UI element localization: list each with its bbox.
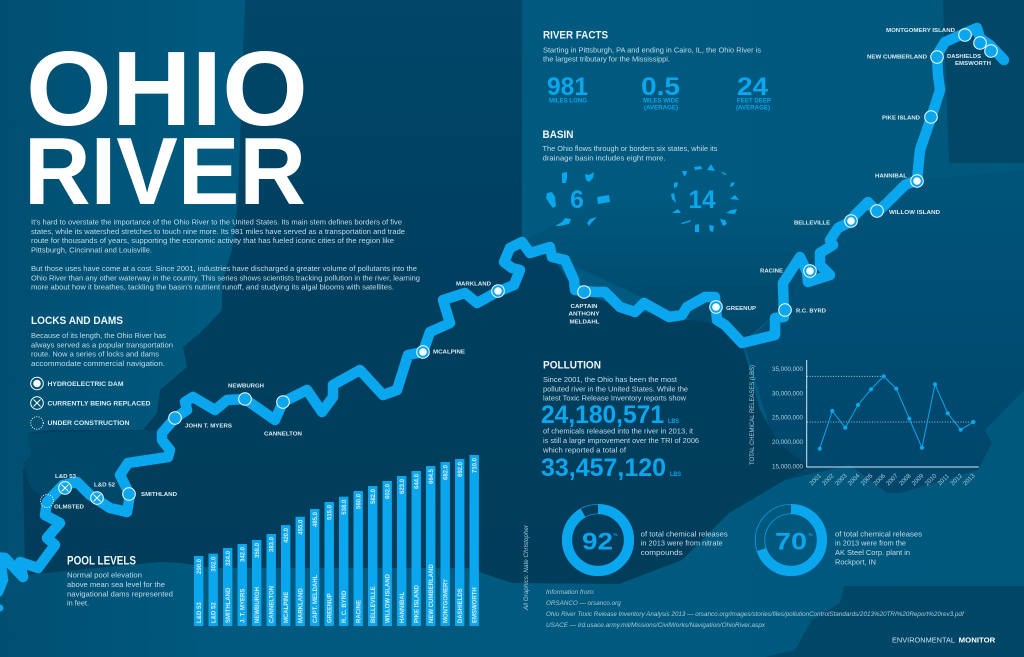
bar chart: pool levels: 383.0 [269,536,275,552]
title [24,30,308,225]
line chart: total chemical releases: 25,000,000 [772,415,804,422]
river facts section: 0.5 [641,73,680,101]
icon: fourteen basin states [671,164,739,232]
bar chart: pool levels: HANNIBAL [400,591,406,623]
dam markers [40,29,997,507]
pool levels text: in feet. [67,599,89,608]
pollution section: which reported a total of [542,445,627,454]
bar chart: pool levels: NEWBURGH [255,587,261,623]
bar chart: pool levels: 692.0 [458,461,464,477]
dam labels: ANTHONY [568,312,600,318]
dam labels: NEWBURGH [228,384,264,390]
line chart: total chemical releases: 2004 [847,472,862,487]
bar chart: pool levels: BELLEVILLE [371,586,377,623]
pool levels text: Normal pool elevation [67,570,142,580]
river facts section: Starting in Pittsburgh, PA and ending in Cairo, IL, the Ohio River is [543,45,761,54]
line chart: total chemical releases: 2002 [821,472,836,487]
intro text: Pittsburgh, Cincinnati and Louisville. [31,246,152,254]
river facts section [543,30,771,112]
donut: 70 percent: % [808,532,813,537]
intro text [31,218,420,292]
bar chart: pool levels: 682.0 [443,464,449,480]
dam labels: NEW CUMBERLAND [867,54,927,60]
bar chart: pool levels [194,455,479,626]
line chart: total chemical releases: 35,000,000 [772,366,804,373]
icon: six basin states [546,172,610,226]
basin section [542,129,718,214]
sources: ORSANCO — orsanco.org [546,600,621,607]
bar chart: pool levels: NEW CUMBERLAND [429,564,435,623]
legend: UNDER CONSTRUCTION [48,420,130,427]
basin section: 6 [570,186,584,214]
line chart: total chemical releases: 2013 [962,472,977,487]
bar chart: pool levels: 560.0 [356,493,362,509]
line chart: total chemical releases: 15,000,000 [772,464,804,471]
bar chart: pool levels: 710.0 [472,457,478,473]
publication brand [892,636,996,644]
dam labels: HANNIBAL [875,174,907,180]
bar chart: pool levels: 644.0 [414,473,420,489]
bar chart: pool levels: 515.0 [327,504,333,520]
pollution section: latest Toxic Release Inventory reports show [543,394,686,403]
callout: AK Steel: Rockport, IN [835,557,876,566]
locks and dams section [31,315,173,368]
river facts section: the largest tributary for the Mississippi. [543,55,670,64]
line chart: total chemical releases: TOTAL CHEMICAL RELEASES (LBS) [749,365,756,465]
dam labels: GREENUP [726,306,756,312]
title: RIVER [24,118,306,225]
intro text: more about how it breathes, tackling the basin’s nutrient runoff, and studying its algal blooms with satellites. [31,283,394,292]
title: OHIO [26,30,308,148]
bar chart: pool levels: 302.0 [211,556,217,572]
bar chart: pool levels: MCALPINE [284,592,290,623]
bar chart: pool levels: 420.0 [284,527,290,543]
pollution section: LBS [668,418,679,425]
line chart: total chemical releases: 2001 [808,472,823,487]
pollution section: 24,180,571 [541,401,664,429]
bar chart: pool levels: CANNELTON [269,586,275,623]
pollution section [541,360,699,482]
legend: HYDROELECTRIC DAM [48,381,124,388]
bar chart: pool levels: 290.0 [197,558,203,574]
pollution section: of chemicals released into the river in 2013, it [543,426,694,436]
bar chart: pool levels: 664.5 [429,468,435,484]
callout: nitrate compounds [641,529,728,557]
pollution section: polluted river in the United States. While the [543,384,688,393]
callout: AK Steel: in 2013 were from the [835,539,906,548]
dam labels: SMITHLAND [141,492,177,498]
dam labels: CANNELTON [264,432,302,438]
dam labels: MONTGOMERY ISLAND [886,28,955,34]
dam labels: JOHN T. MYERS [185,424,232,430]
bar chart: pool levels: RACINE [356,600,362,623]
pollution section: POLLUTION [543,360,601,372]
publication brand: ENVIRONMENTAL [892,636,955,644]
dam labels: DASHIELDS [947,54,981,60]
dam labels: MELDAHL [570,320,600,326]
pool levels text: POOL LEVELS [67,556,136,568]
bar chart: pool levels: L&D 53 [197,602,203,623]
sources: Ohio River Toxic Release Inventory Analysis 2013 — orsanco.org/images/stories/files/pollutionControlStandards/2013%20TRI%20Report%20rev3.pdf [546,611,965,618]
bar chart: pool levels: MONTGOMERY [443,579,449,623]
donut: 92 percent [562,504,634,576]
bar chart: pool levels: 358.0 [255,542,261,558]
river facts section: RIVER FACTS [543,30,608,42]
intro text: It’s hard to overstate the importance of the Ohio River to the United States. Its main stem defines borders of five [31,218,402,226]
line chart: total chemical releases: 20,000,000 [772,439,804,446]
callout: AK Steel: of total chemical releases [835,529,922,538]
line chart: total chemical releases: 2011 [936,472,951,487]
bar chart: pool levels: 602.0 [385,483,391,499]
bar chart: pool levels: EMSWORTH [472,587,478,623]
river facts section: MILES LONG [549,98,587,104]
dam labels: MARKLAND [456,282,491,288]
tail of river at left edge [0,604,4,612]
bar chart: pool levels: 324.0 [226,550,232,566]
bar chart: pool levels: 582.0 [371,488,377,504]
pollution section: 33,457,120 [541,454,666,482]
callout: nitrate compounds: in 2013 were from nitrate [641,539,723,548]
bar chart: pool levels: PIKE ISLAND [414,584,420,623]
dam labels: L&D 52 [94,482,116,488]
dam labels: OLMSTED [54,504,84,510]
callout: nitrate compounds: compounds [641,548,683,557]
line chart: total chemical releases: 30,000,000 [772,390,804,397]
donut: 92 percent: % [614,532,618,537]
bar chart: pool levels: R. C. BYRD [342,590,348,623]
locks and dams section: route. Now a series of locks and dams [31,350,159,359]
river facts section: (AVERAGE) [736,104,770,112]
pollution section: Since 2001, the Ohio has been the most [543,375,678,384]
intro text: Ohio River than any other waterway in the country. This series shows scientists tracking pollution in the river, learning [31,273,420,282]
basin section: 14 [688,186,716,214]
bar chart: pool levels: WILLOW ISLAND [385,573,391,623]
dam labels: L&D 53 [55,474,77,480]
river facts section: FEET DEEP [737,98,771,104]
line chart: total chemical releases: 2007 [885,472,900,487]
sources [546,589,965,629]
bar chart: pool levels: GREENUP [327,593,333,623]
dam labels: PIKE ISLAND [882,116,920,122]
dam labels: EMSWORTH [955,61,991,67]
callout: AK Steel: AK Steel Corp. plant in [835,548,910,557]
line chart: total chemical releases: 2012 [949,472,964,487]
bar chart: pool levels: 455.0 [298,519,304,535]
bar chart: pool levels: DASHIELDS [458,588,464,623]
sources: USACE — lrd.usace.army.mil/Missions/CivilWorks/Navigation/OhioRiver.aspx [546,622,766,629]
bar chart: pool levels: SMITHLAND [226,587,232,623]
basin section: The Ohio flows through or borders six states, while its [542,144,718,153]
dam labels: CAPTAIN [570,304,598,310]
pool levels text: above mean sea level for the [67,580,165,589]
bar chart: pool levels: MARKLAND [298,588,304,623]
legend [31,377,151,429]
bar chart: pool levels: J. T. MYERS [240,589,246,623]
publication brand: MONITOR [959,636,996,644]
intro text: states, while its watershed stretches to touch nine more. Its 981 miles have served as a transportation and trade [31,227,405,236]
legend: CURRENTLY BEING REPLACED [48,400,151,408]
donut: 70 percent [755,504,827,576]
line chart: total chemical releases: 2010 [924,472,939,487]
pool levels text [67,556,173,608]
line chart: total chemical releases: 2005 [860,472,875,487]
donut: 70 percent: 70 [775,528,807,556]
line chart: total chemical releases: 2008 [898,472,913,487]
dam labels: R.C. BYRD [796,308,826,314]
sources: Information from: [546,589,595,596]
river facts section: MILES WIDE [643,98,679,104]
pollution section: is still a large improvement over the TRI of 2006 [543,436,699,445]
basin section: drainage basin includes eight more. [542,154,666,163]
pollution section: LBS [670,471,681,478]
donut: 92 percent: 92 [582,528,613,556]
river facts section: (AVERAGE) [644,104,678,112]
callout: AK Steel [835,529,922,566]
bar chart: pool levels: CAPT. MELDAHL [313,574,319,623]
bar chart: pool levels: 538.0 [342,499,348,515]
intro text: route for thousands of years, supporting the economic activity that has fueled iconic cities of the region like [31,236,394,245]
pool levels text: navigational dams represented [67,589,173,598]
graphics credit: All Graphics: Nate Christopher [523,524,530,611]
locks and dams section: accommodate commercial navigation. [31,359,165,368]
bar chart: pool levels: L&D 52 [211,602,217,623]
locks and dams section: Because of its length, the Ohio River has [31,331,166,340]
line chart: total chemical releases: 2003 [834,472,849,487]
callout: nitrate compounds: of total chemical releases [641,529,728,538]
dam labels: WILLOW ISLAND [889,210,940,216]
line chart: total chemical releases [749,360,979,487]
locks and dams section: always served as a popular transportation [31,340,173,349]
locks and dams section: LOCKS AND DAMS [31,315,123,327]
line chart: total chemical releases: 2009 [911,472,926,487]
line chart: total chemical releases: 2006 [872,472,887,487]
bar chart: pool levels: 623.0 [400,478,406,494]
dam labels: MCALPINE [433,350,465,356]
river facts section: 981 [547,73,588,101]
bar chart: pool levels: 342.0 [240,546,246,562]
dam labels: RACINE [760,268,783,274]
dam labels [54,28,991,510]
basin section: BASIN [542,129,574,141]
dam labels: BELLEVILLE [794,220,830,226]
river facts section: 24 [737,73,768,101]
intro text: But those uses have come at a cost. Since 2001, industries have discharged a greater volume of pollutants into the [31,264,417,273]
bar chart: pool levels: 485.0 [313,511,319,527]
